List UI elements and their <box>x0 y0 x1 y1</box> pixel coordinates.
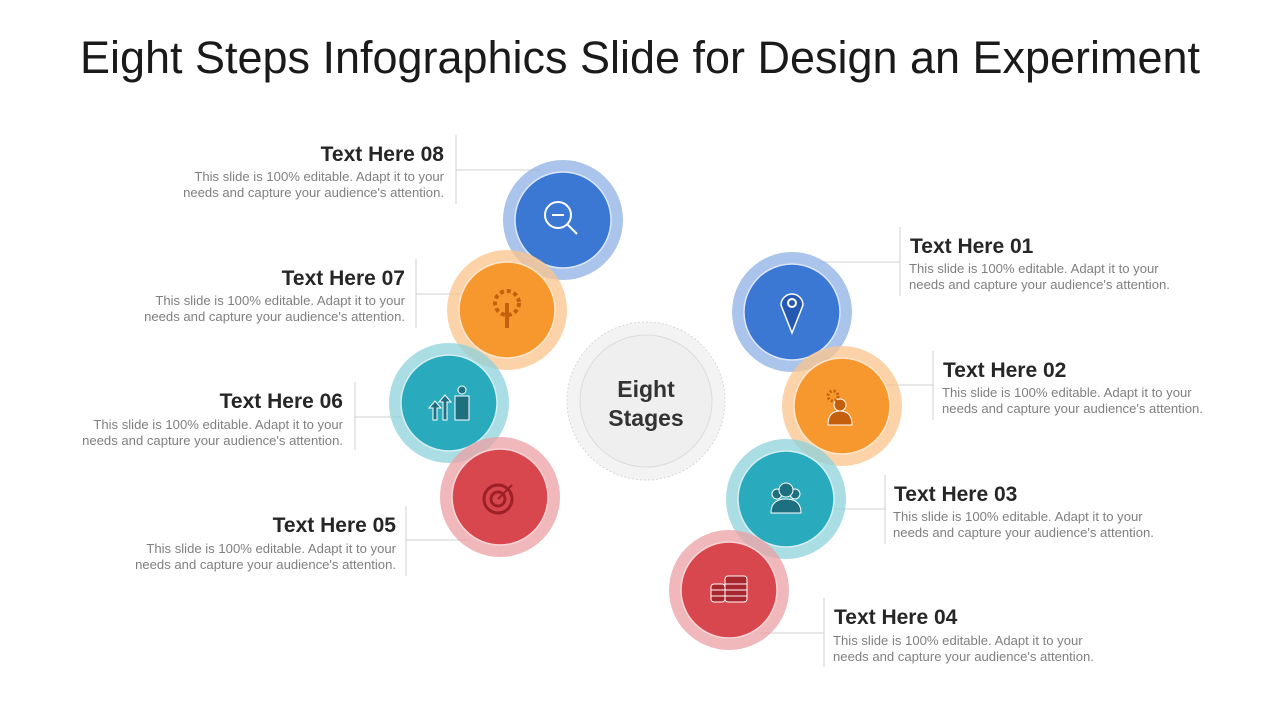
text 06 <box>82 390 344 448</box>
text 03: Text Here 03 <box>894 483 1017 506</box>
text 05: needs and capture your audience's attention. <box>135 557 396 572</box>
title: Eight Steps Infographics Slide for Design an Experiment <box>80 32 1200 83</box>
text 08 <box>183 143 445 200</box>
text 08: needs and capture your audience's attention. <box>183 185 444 200</box>
text 06: Text Here 06 <box>220 390 343 413</box>
circle 08: blue search <box>503 160 623 280</box>
text 04: needs and capture your audience's attention. <box>833 649 1094 664</box>
text 01: needs and capture your audience's attention. <box>909 277 1170 292</box>
circle 07: orange gear wrench <box>447 250 567 370</box>
circle 02: orange person gears <box>782 346 902 466</box>
text 03: needs and capture your audience's attention. <box>893 525 1154 540</box>
text 08: Text Here 08 <box>321 143 444 166</box>
text 05 <box>135 514 397 572</box>
circle 05: red target <box>440 437 560 557</box>
text 07: needs and capture your audience's attention. <box>144 309 405 324</box>
text 02: This slide is 100% editable. Adapt it to your <box>942 385 1192 400</box>
circle 04: red coins <box>669 530 789 650</box>
connector lines <box>355 135 933 667</box>
text 01: Text Here 01 <box>910 235 1034 258</box>
text 07: Text Here 07 <box>282 267 405 290</box>
text 01: This slide is 100% editable. Adapt it to your <box>909 261 1159 276</box>
text 06: This slide is 100% editable. Adapt it to your <box>93 417 344 432</box>
circle 06: teal growth <box>389 343 509 463</box>
text 02: needs and capture your audience's attention. <box>942 401 1203 416</box>
text 04: This slide is 100% editable. Adapt it to your <box>833 633 1083 648</box>
text 04: Text Here 04 <box>834 606 958 629</box>
text 07: This slide is 100% editable. Adapt it to your <box>155 293 406 308</box>
text 05: This slide is 100% editable. Adapt it to your <box>146 541 397 556</box>
center circle: Eight Stages: Stages <box>608 405 684 431</box>
center circle: Eight Stages <box>567 322 725 480</box>
text 07 <box>144 267 406 324</box>
text 08: This slide is 100% editable. Adapt it to your <box>194 169 445 184</box>
center circle: Eight Stages: Eight <box>617 376 675 402</box>
text 06: needs and capture your audience's attention. <box>82 433 343 448</box>
text 01 <box>909 235 1170 292</box>
text 05: Text Here 05 <box>273 514 396 537</box>
text 02: Text Here 02 <box>943 359 1066 382</box>
circle 01: blue location <box>732 252 852 372</box>
text 02 <box>942 359 1203 416</box>
circle 03: teal team <box>726 439 846 559</box>
text 03: This slide is 100% editable. Adapt it to your <box>893 509 1143 524</box>
text 04 <box>833 606 1094 664</box>
text 03 <box>893 483 1154 540</box>
